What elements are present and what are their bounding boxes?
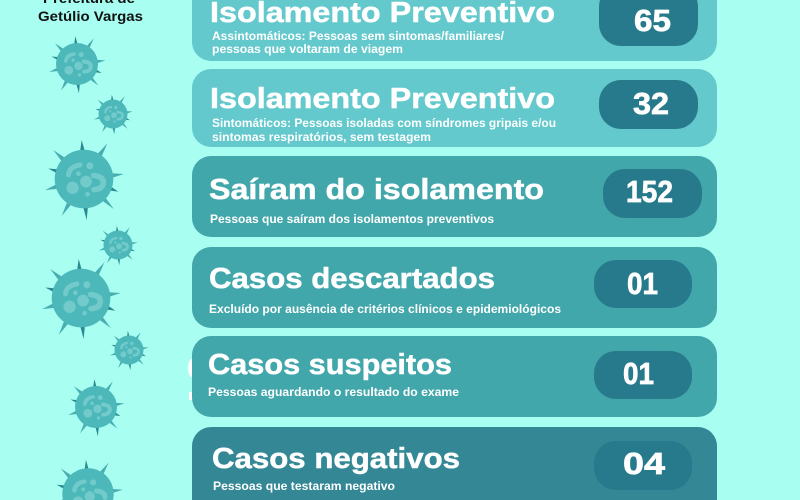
description (212, 31, 505, 56)
value pill (594, 441, 692, 490)
panel: casos suspeitos (192, 336, 717, 417)
value pill: 04 (623, 446, 666, 481)
panel: isolamento preventivo assintomáticos (192, 0, 717, 61)
heading: Casos descartados (209, 263, 495, 295)
icon: virus 6 (110, 331, 149, 370)
icon: virus 3 (45, 140, 124, 220)
description: sintomas respiratórios, sem testagem (212, 132, 431, 144)
panel: isolamento preventivo sintomáticos (192, 69, 717, 147)
description: Assintomáticos: Pessoas sem sintomas/familiares/ (212, 31, 505, 43)
description: Pessoas que testaram negativo (213, 481, 395, 493)
heading: Saíram do isolamento (209, 174, 544, 206)
heading: Isolamento Preventivo (210, 83, 555, 115)
description: pessoas que voltaram de viagem (212, 44, 403, 56)
icon: virus 5 (42, 259, 121, 339)
description: Pessoas aguardando o resultado do exame (208, 387, 459, 399)
value pill: 65 (634, 3, 671, 38)
value pill (594, 351, 692, 399)
value pill: 152 (626, 174, 673, 209)
value pill: 01 (623, 356, 654, 391)
panel: casos negativos (192, 427, 717, 500)
icon: virus 2 (94, 95, 133, 134)
value pill (594, 260, 692, 308)
panel: casos descartados (192, 247, 717, 328)
value pill: 01 (627, 266, 658, 301)
value pill (599, 80, 698, 129)
logo text: Prefeitura de Getúlio Vargas (38, 0, 143, 24)
heading: Casos suspeitos (208, 349, 452, 381)
description: Pessoas que saíram dos isolamentos preventivos (210, 214, 494, 226)
panel: saíram do isolamento (192, 156, 717, 237)
description: Sintomáticos: Pessoas isoladas com síndromes gripais e/ou (212, 118, 556, 130)
icon: virus 1 (49, 36, 106, 93)
value pill (599, 0, 698, 46)
value pill (603, 169, 702, 218)
description: Excluído por ausência de critérios clínicos e epidemiológicos (209, 304, 561, 316)
logo text: Prefeitura de Getúlio Vargas: Getúlio Vargas (38, 8, 143, 24)
icon: virus 7 (68, 379, 125, 436)
heading: Casos negativos (212, 443, 460, 475)
description (212, 118, 556, 144)
value pill: 32 (633, 86, 669, 121)
icon: virus 4 (99, 226, 138, 265)
icon: virus 8 (cut by the bottom edge) (57, 460, 123, 500)
